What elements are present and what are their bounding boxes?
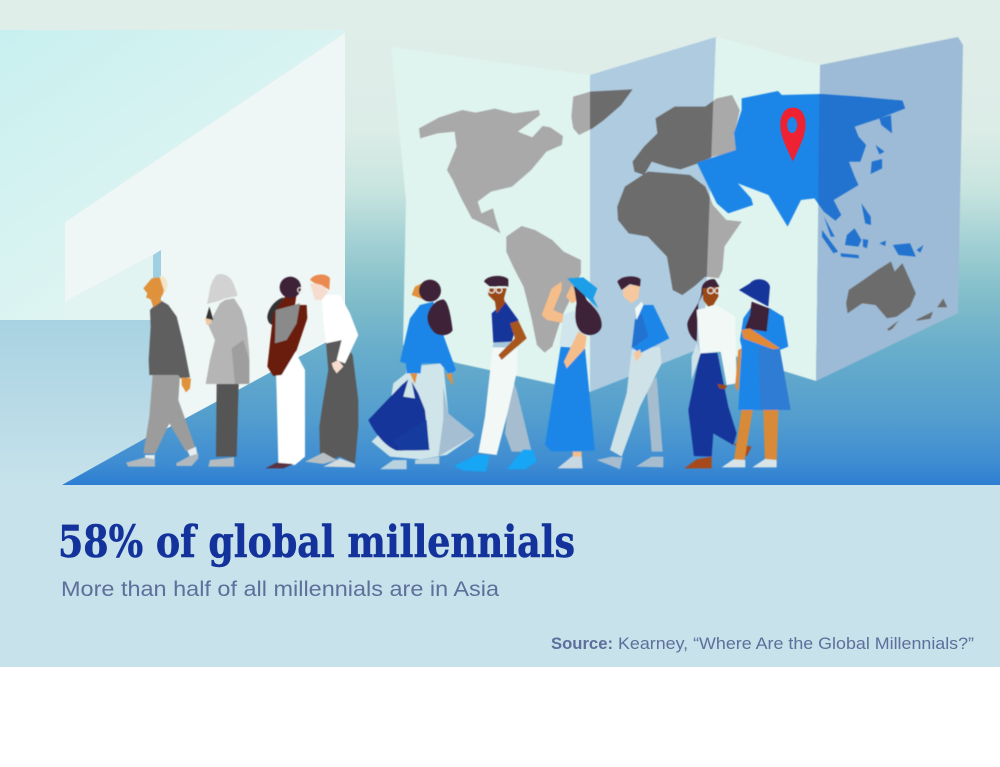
subtitle: More than half of all millennials are in Asia (61, 578, 499, 601)
source note: Source: (551, 635, 613, 653)
person: woman in white shirt and navy trousers (684, 279, 752, 468)
person: man in grey jacket (126, 276, 198, 467)
person: woman in grey coat (205, 274, 249, 467)
heading: 58% of global millennials (58, 517, 575, 568)
left room wall (0, 30, 345, 485)
source note: Kearney, “Where Are the Global Millennials?” (618, 635, 974, 653)
person: woman in blue dress and bucket hat (722, 279, 791, 467)
icon: red location pin (780, 108, 806, 162)
person: man in blue sweater (597, 276, 669, 469)
person: man in navy shirt (454, 276, 537, 472)
continents on light panels (419, 89, 742, 353)
people queue (126, 274, 791, 472)
Asia highlighted (697, 91, 905, 227)
Asia on darker panel and islands (818, 94, 924, 259)
person: man in white shirt (305, 274, 358, 467)
person: woman with blue bag (368, 280, 475, 469)
person: woman with glasses and white trousers (265, 277, 307, 468)
folded map panels (391, 37, 963, 392)
Australia and nearby islands (846, 262, 947, 331)
person: woman in blue hat and skirt (542, 277, 602, 468)
continents on blue panel (589, 88, 714, 296)
world map continents (419, 89, 947, 353)
